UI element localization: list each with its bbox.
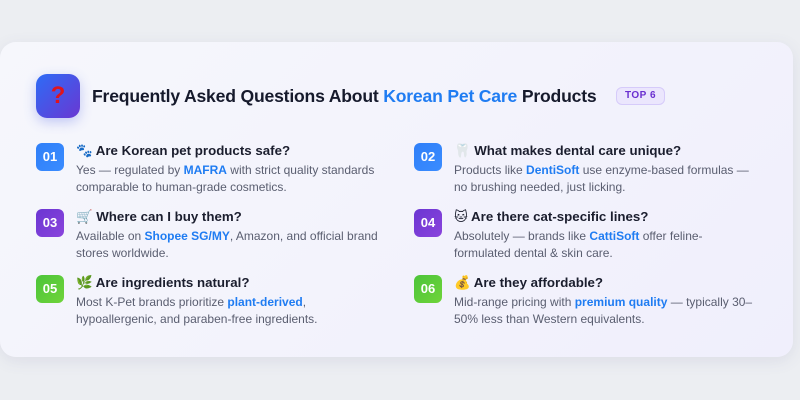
item 02: no brushing needed, just licking. (454, 180, 625, 194)
item 04: formulated dental & skin care. (454, 246, 613, 260)
item 06: 50% less than Western equivalents. (454, 312, 645, 326)
item 01: comparable to human-grade cosmetics. (76, 180, 287, 194)
item 02 (414, 143, 749, 194)
item 04 (414, 209, 703, 260)
item 05: Most K-Pet brands prioritize plant-derived, (76, 295, 306, 309)
item 06: Mid-range pricing with premium quality — typically 30– (454, 295, 752, 309)
item 01: 01 (43, 149, 57, 164)
item 04: 🐱 Are there cat-specific lines? (454, 209, 648, 224)
item 03: stores worldwide. (76, 246, 169, 260)
item 04: Absolutely — brands like CattiSoft offer feline- (454, 229, 703, 243)
item 05: hypoallergenic, and paraben-free ingredients. (76, 312, 318, 326)
item 06 (414, 275, 752, 326)
item 01: 🐾 Are Korean pet products safe? (76, 143, 290, 158)
item 03: Available on Shopee SG/MY, Amazon, and official brand (76, 229, 378, 243)
panel: card (0, 42, 793, 357)
item 02: 02 (421, 149, 435, 164)
badge: top 6 (616, 87, 665, 105)
item 05: 05 (43, 281, 57, 296)
item 03: 🛒 Where can I buy them? (76, 209, 242, 224)
item 03: 03 (43, 215, 57, 230)
item 05: 🌿 Are ingredients natural? (76, 275, 249, 290)
item 01 (36, 143, 374, 194)
item 01: Yes — regulated by MAFRA with strict quality standards (76, 163, 374, 177)
icon: question mark: ? (51, 82, 65, 109)
icon: question mark (36, 74, 80, 118)
item 04: 04 (421, 215, 435, 230)
item 02: Products like DentiSoft use enzyme-based formulas — (454, 163, 749, 177)
item 06: 💰 Are they affordable? (454, 275, 603, 290)
badge: top 6: TOP 6 (625, 90, 656, 101)
item 06: 06 (421, 281, 435, 296)
item 03 (36, 209, 378, 260)
title: Frequently Asked Questions About Korean Pet Care Products (92, 86, 596, 106)
item 02: 🦷 What makes dental care unique? (454, 143, 681, 158)
item 05 (36, 275, 318, 326)
